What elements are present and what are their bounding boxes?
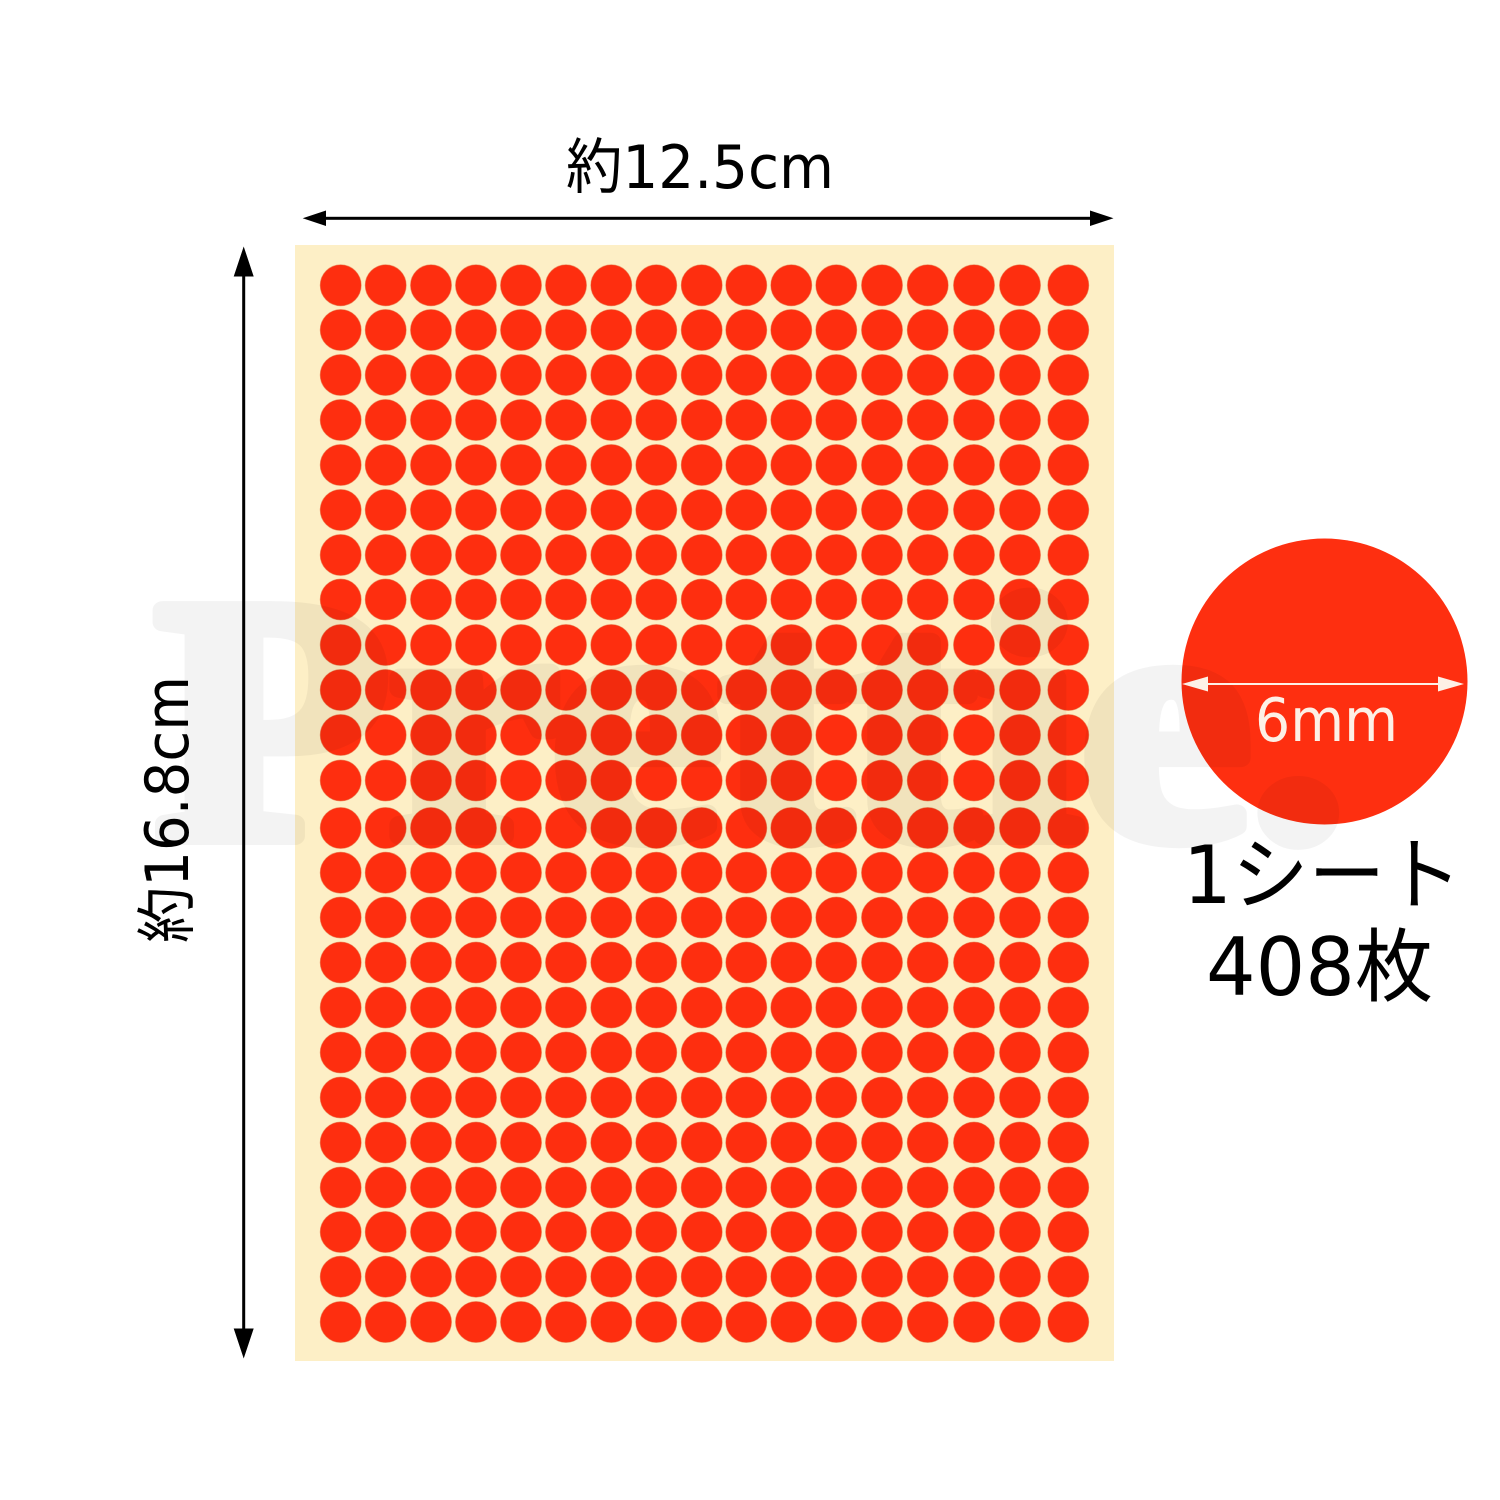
label: sticker diameter: 6mm (1255, 686, 1398, 756)
label: sheet height: 約16.8cm (133, 676, 203, 943)
label: sheet count line 1: 1シート (1183, 829, 1462, 922)
watermark: Prettie. (156, 529, 1346, 911)
arrow: sheet height (234, 246, 254, 1358)
label: sheet width: 約12.5cm (566, 133, 834, 203)
arrow: sheet width (303, 210, 1114, 226)
arrow: sticker diameter (1182, 676, 1464, 692)
large sticker circle (1182, 538, 1468, 824)
panel: sticker sheet (295, 245, 1114, 1361)
label: sheet count line 2: 408枚 (1206, 921, 1433, 1014)
